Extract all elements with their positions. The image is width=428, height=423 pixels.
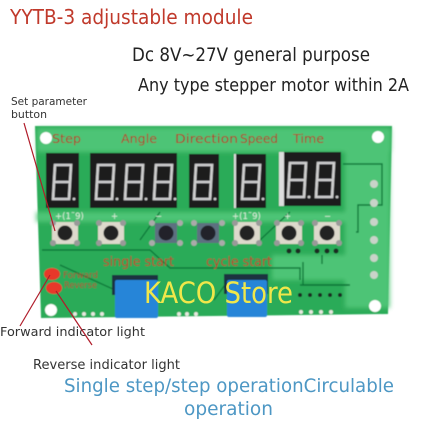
subtitle: voltage: Dc 8V~27V general purpose	[132, 44, 370, 66]
button labels: +	[284, 212, 291, 222]
circuit board	[35, 126, 392, 318]
label: reverse indicator light: Reverse indicator light	[33, 358, 180, 373]
button labels: −	[155, 212, 162, 222]
caption line 1: Single step/step operationCirculable	[64, 375, 394, 397]
header pins	[73, 310, 333, 316]
watermark: KACO Store: KACO Store	[144, 276, 293, 310]
direction display	[189, 154, 219, 208]
board labels row: Direction	[175, 131, 238, 146]
label: set parameter button: button	[11, 109, 47, 121]
arrow: set parameter button	[24, 123, 55, 231]
black solder joints	[286, 248, 342, 297]
right terminal pads	[370, 180, 378, 279]
step display	[46, 153, 79, 208]
time display	[279, 152, 341, 206]
button labels	[55, 212, 331, 222]
title: YYTB-3 adjustable module	[9, 5, 253, 29]
caption line 2: operation	[184, 398, 273, 420]
board labels row: Step	[52, 131, 81, 146]
speed display	[234, 154, 266, 208]
button labels: −	[324, 212, 331, 222]
board labels row: Angle	[121, 131, 157, 146]
start labels	[103, 255, 272, 270]
label: forward indicator light: Forward indicator light	[0, 324, 145, 339]
forward and reverse LEDs	[44, 268, 98, 294]
mounting holes	[40, 131, 384, 316]
board labels row	[52, 131, 324, 146]
parameter buttons	[50, 220, 342, 246]
arrow: reverse indicator	[56, 291, 92, 345]
button labels: +(1˜9)	[55, 212, 84, 222]
blue buttons	[112, 274, 268, 318]
board labels row: Speed	[240, 131, 278, 146]
arrow: forward indicator	[20, 275, 50, 326]
button labels: +	[111, 212, 118, 222]
label: set parameter button: Set parameter	[11, 96, 88, 108]
board labels row: Time	[292, 131, 324, 146]
angle display	[90, 153, 177, 208]
start labels: single start	[103, 255, 174, 270]
forward and reverse LEDs: Forward	[63, 271, 98, 281]
forward and reverse LEDs: Reverse	[64, 281, 97, 291]
button labels: +(1˜9)	[232, 212, 261, 222]
start labels: cycle start	[206, 255, 272, 270]
